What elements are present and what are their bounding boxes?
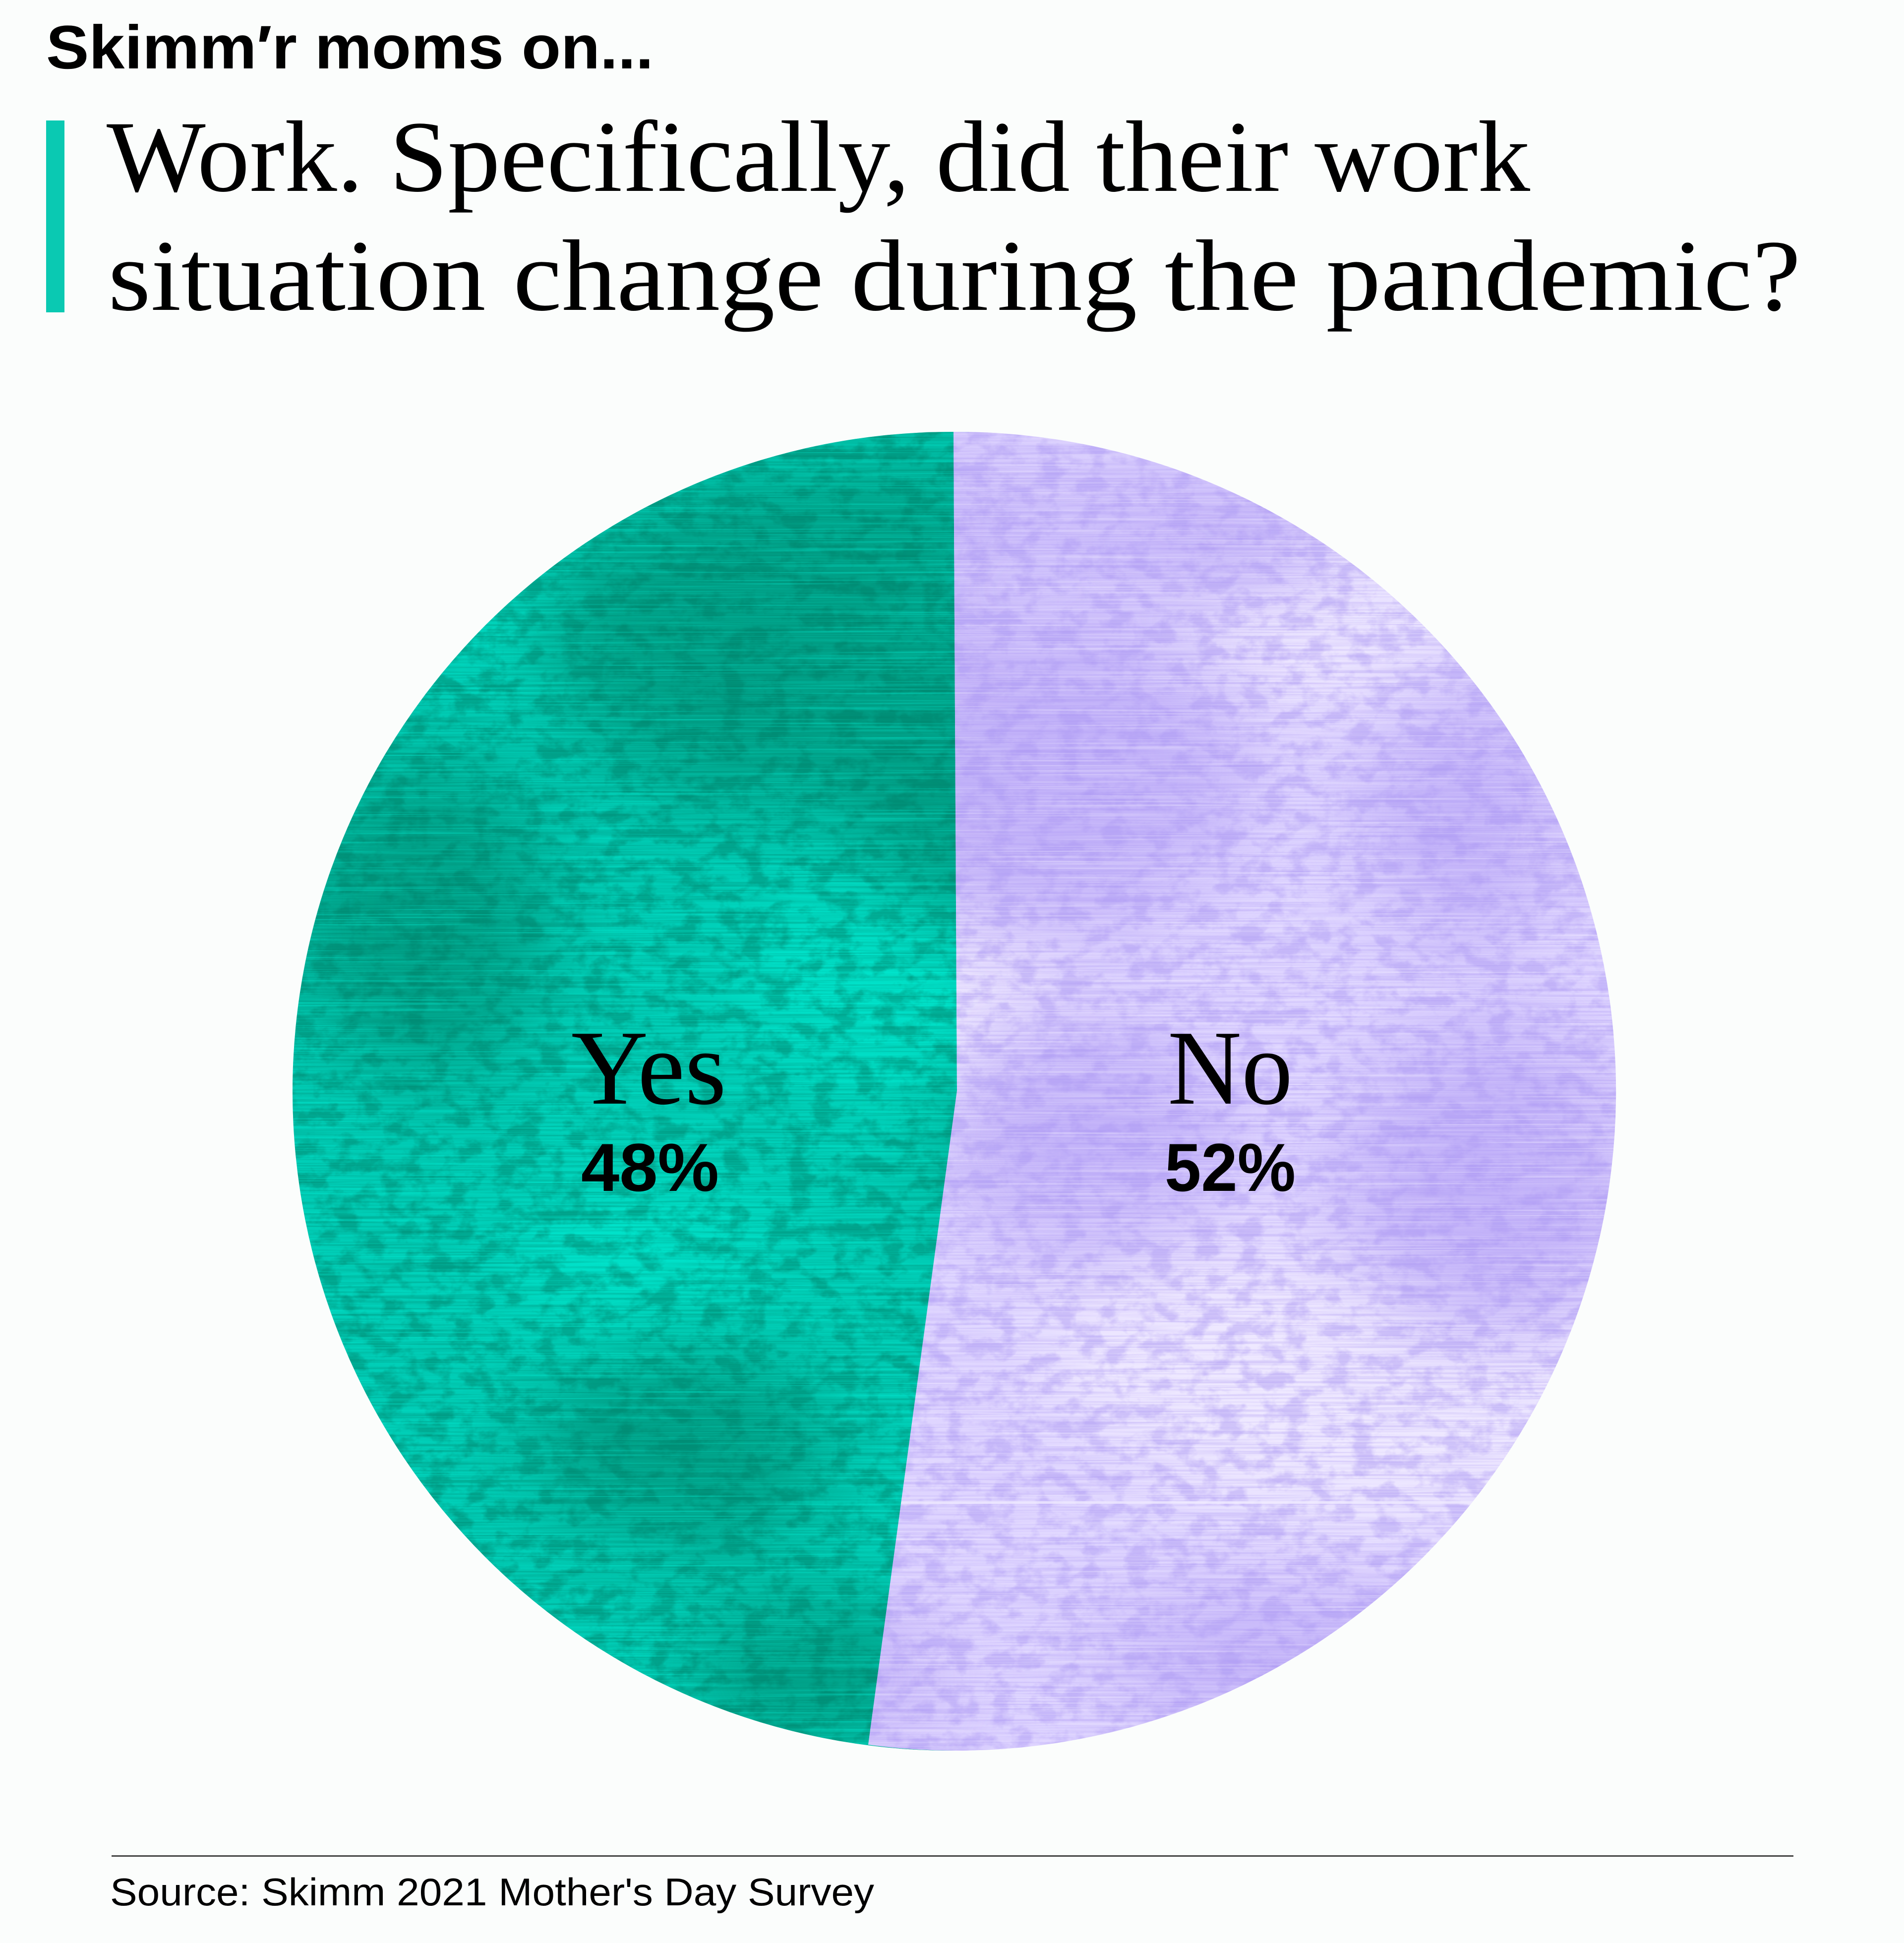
accent bar (46, 120, 64, 312)
label: no: No (1168, 1008, 1293, 1127)
pie slice: no 52% (868, 432, 1616, 1751)
title: Work. Specifically, did their work (107, 101, 1531, 213)
value: 48%: 48% (581, 1130, 719, 1206)
pie slice: yes 48% (293, 432, 982, 1751)
title: situation change during the pandemic? (108, 220, 1801, 332)
pie chart (288, 426, 1636, 1755)
label: yes: Yes (571, 1008, 726, 1127)
title (107, 101, 1801, 332)
eyebrow heading: Skimm′r moms on... (46, 13, 654, 82)
value: 52%: 52% (1165, 1130, 1296, 1206)
source note: Source: Skimm 2021 Mother's Day Survey (110, 1870, 874, 1914)
